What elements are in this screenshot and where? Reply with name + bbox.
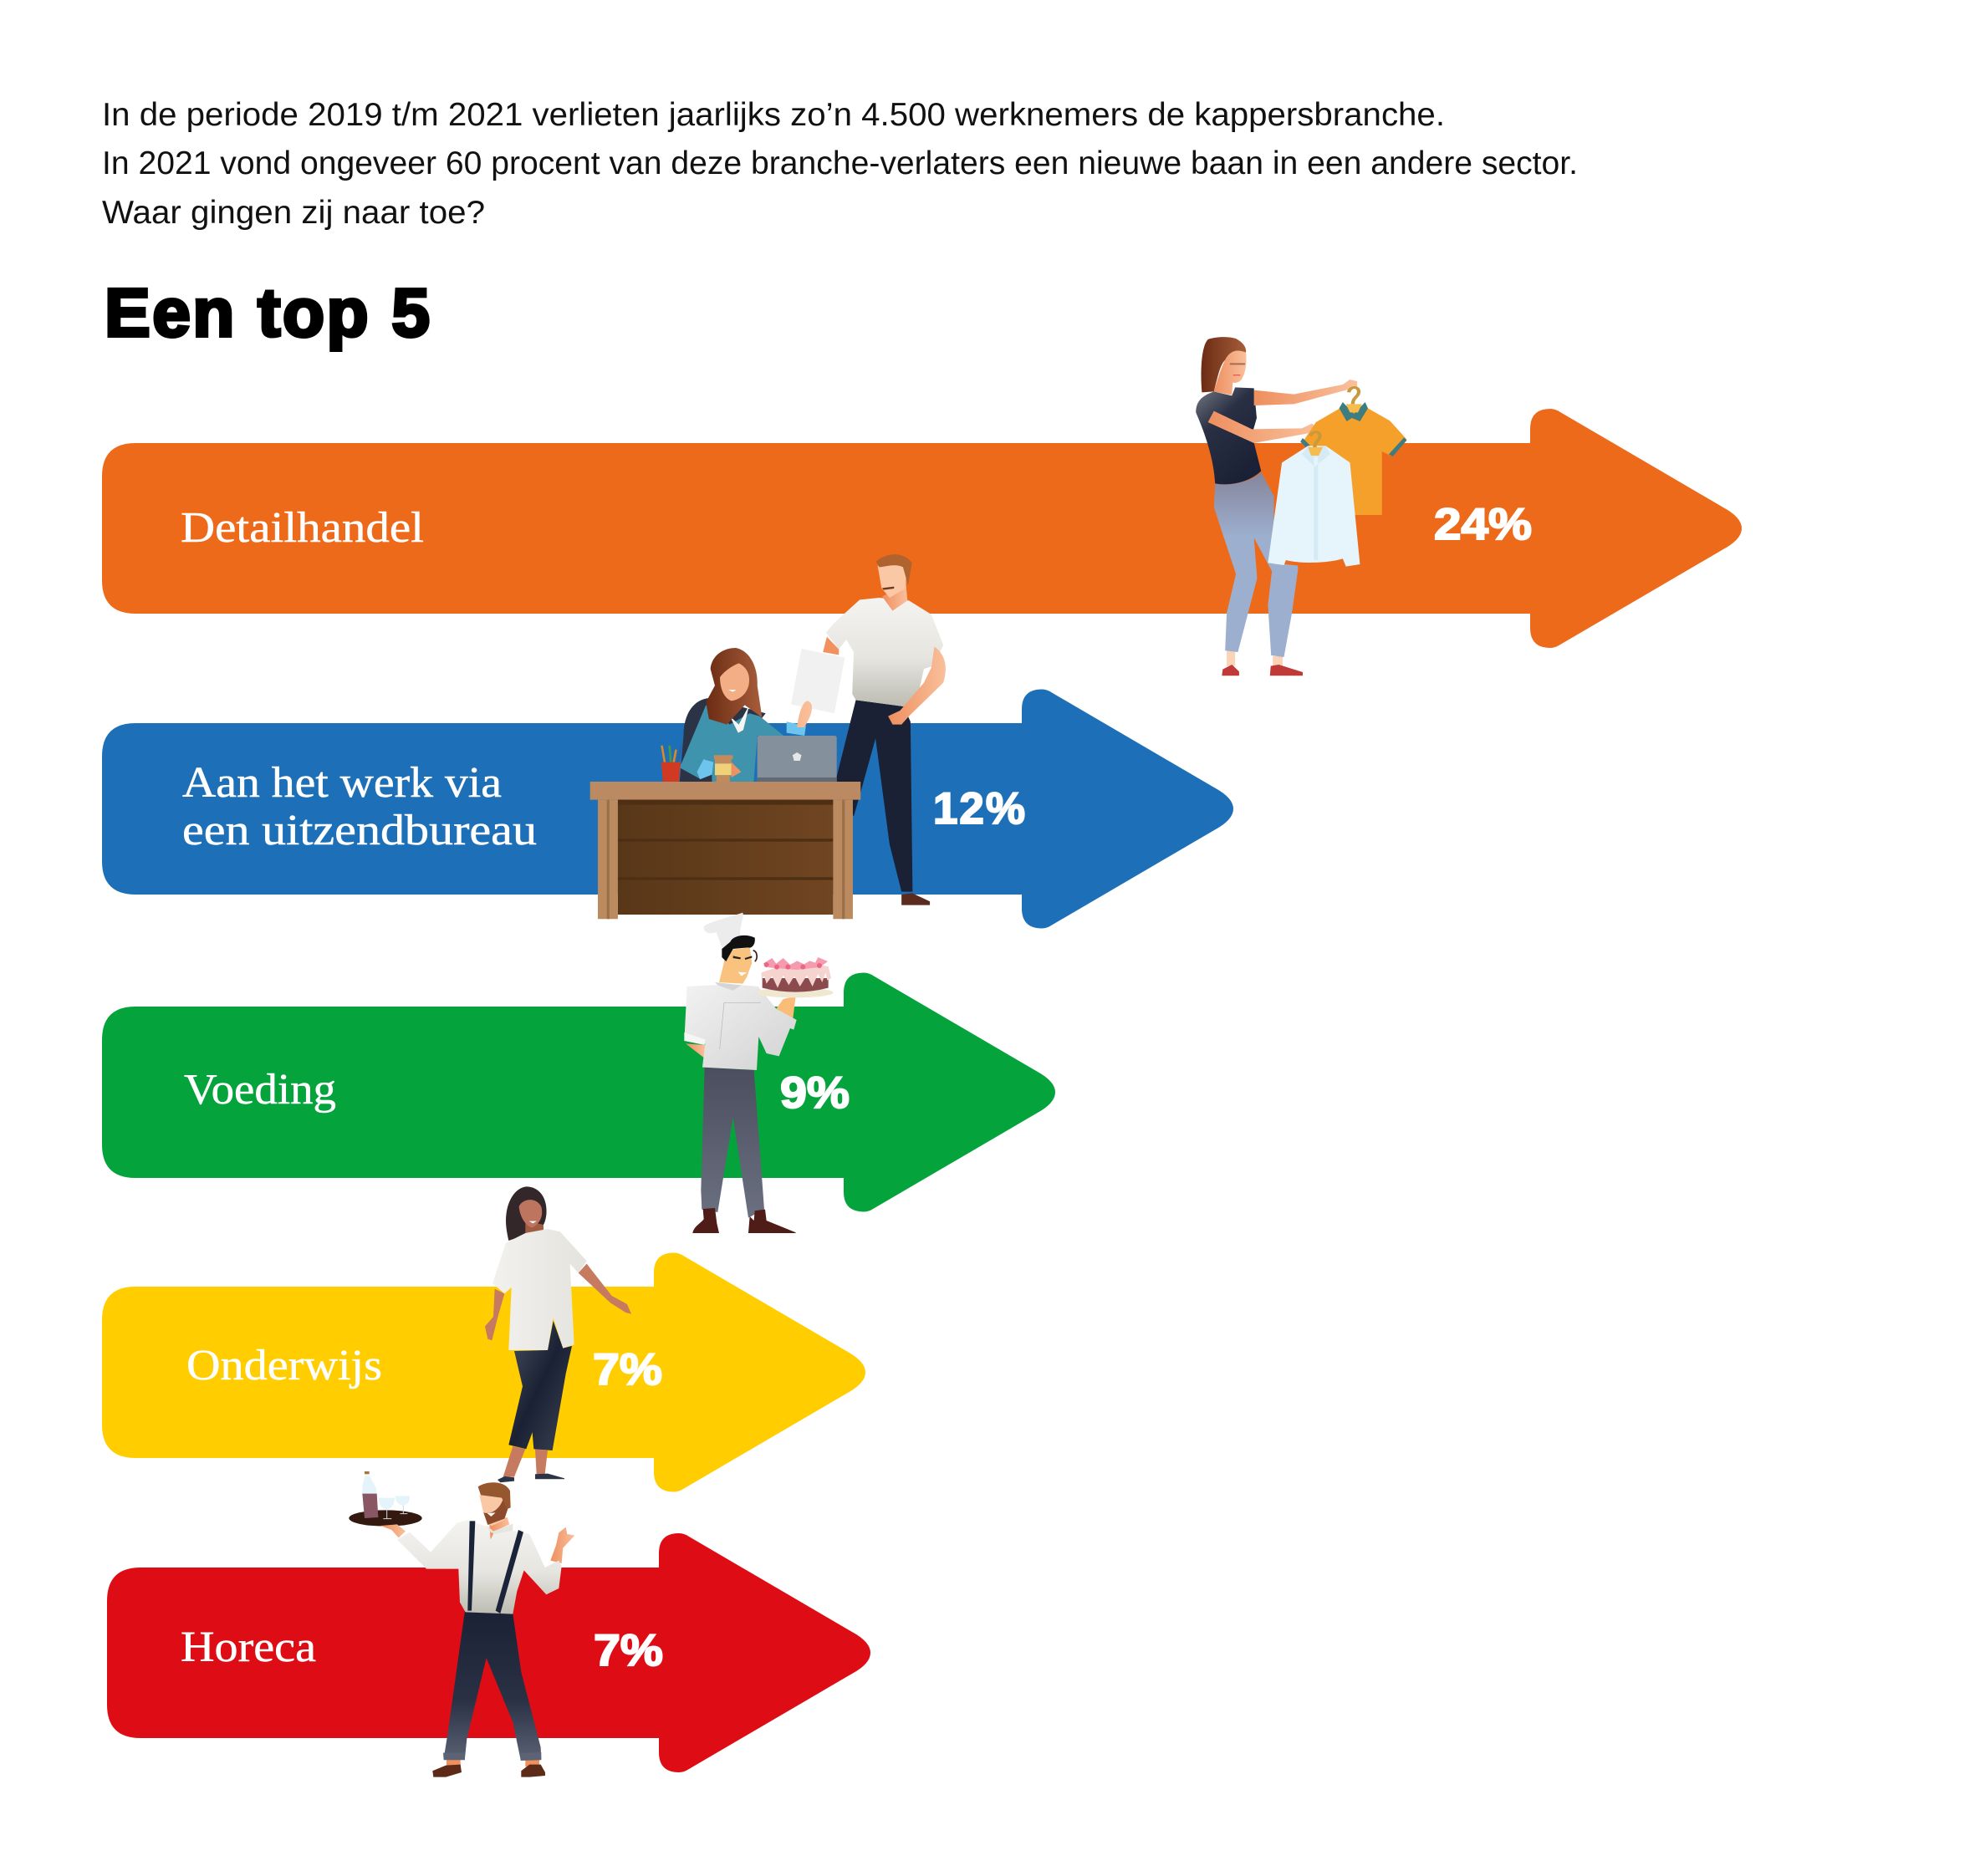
- value: 7%: 7%: [593, 1345, 662, 1394]
- panel: Detailhandel: [102, 409, 1742, 648]
- intro text: In de periode 2019 t/m 2021 verlieten jaarlijks zo’n 4.500 werknemers de kappersbranche.: [102, 97, 1445, 133]
- value: 12%: 12%: [933, 784, 1025, 833]
- icon: shop assistant with clothes: [1196, 337, 1406, 675]
- intro text: In 2021 vond ongeveer 60 procent van deze branche-verlaters een nieuwe baan in een andere sector.: [102, 145, 1578, 181]
- icon: chef with cake: [684, 913, 834, 1233]
- arrow: Detailhandel: [102, 409, 1742, 648]
- title: Een top 5: [105, 275, 430, 351]
- icon: teacher woman: [485, 1186, 631, 1482]
- label: Aan het werk via een uitzendbureau: een uitzendbureau: [182, 807, 537, 854]
- icon: office workers at desk: [590, 554, 946, 919]
- arrow: Onderwijs: [102, 1252, 865, 1491]
- label: Aan het werk via een uitzendbureau: [182, 759, 537, 854]
- value: 24%: 24%: [1434, 500, 1532, 549]
- panel: Voeding: [102, 973, 1055, 1212]
- intro text: Waar gingen zij naar toe?: [102, 195, 485, 231]
- label: Voeding: Voeding: [184, 1066, 336, 1114]
- arrow: uitzendbureau: [102, 689, 1233, 928]
- panel: Horeca: [107, 1533, 870, 1772]
- arrow: Voeding: [102, 973, 1055, 1212]
- label: Horeca: Horeca: [181, 1624, 316, 1671]
- arrow: Horeca: [107, 1533, 870, 1772]
- panel: Onderwijs: [102, 1252, 865, 1491]
- label: Detailhandel: Detailhandel: [181, 504, 424, 552]
- panel: Aan het werk via een uitzendbureau: [102, 689, 1233, 928]
- intro text: [102, 97, 1578, 231]
- value: 9%: 9%: [780, 1068, 850, 1118]
- value: 7%: 7%: [594, 1626, 663, 1675]
- icon: waiter with tray: [349, 1471, 574, 1777]
- label: Onderwijs: Onderwijs: [186, 1342, 382, 1389]
- label: Aan het werk via een uitzendbureau: Aan het werk via: [182, 759, 502, 807]
